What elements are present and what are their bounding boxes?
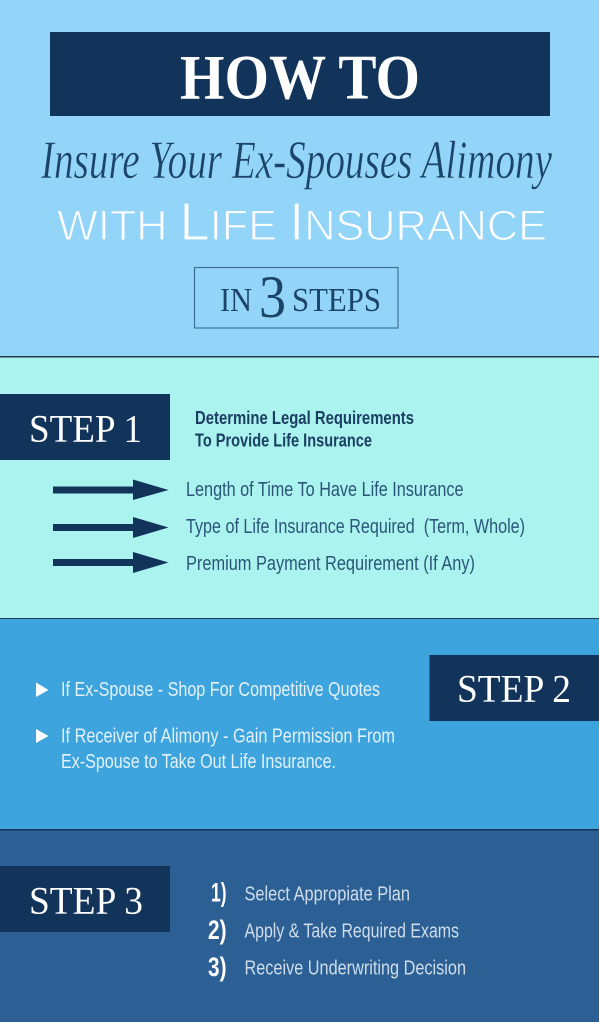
list item 1: Select Appropiate Plan [244, 884, 410, 906]
text: ex-spouse: If Ex-Spouse - Shop For Competitive Quotes [61, 679, 380, 701]
step 2 label: STEP 2 [457, 668, 571, 710]
text: receiver of alimony [61, 726, 395, 773]
list item 1: 1) [211, 878, 226, 908]
list item 3 [208, 952, 466, 982]
text: receiver of alimony: Ex-Spouse to Take Out Life Insurance. [61, 751, 336, 773]
title banner: how to [50, 32, 550, 116]
step 3 label [0, 866, 170, 932]
item: type of insurance: Type of Life Insurance Required (Term, Whole) [186, 516, 525, 538]
badge: in 3 steps [194, 264, 398, 330]
step 1 heading: To Provide Life Insurance [195, 430, 372, 450]
bullet 1 [36, 682, 48, 697]
list item 2: 2) [208, 915, 226, 945]
step 2 label [430, 655, 599, 721]
panel: step 2 [0, 619, 599, 829]
list item 3: 3) [208, 952, 226, 982]
arrow 1 [53, 480, 168, 500]
step 1 heading: Determine Legal Requirements [195, 408, 414, 428]
title banner: how to: HOW TO [180, 42, 420, 112]
badge: in 3 steps: IN [220, 282, 252, 319]
text: receiver of alimony: If Receiver of Alimony - Gain Permission From [61, 726, 395, 748]
heading: with life insurance: WITH LIFE INSURANCE [57, 192, 547, 252]
arrow 2 [53, 517, 168, 538]
panel: step 1 [0, 358, 599, 618]
badge: in 3 steps: 3 [259, 264, 286, 330]
list item 2: Apply & Take Required Exams [244, 920, 459, 942]
step 1 label [0, 394, 170, 460]
step 1 heading [195, 408, 414, 450]
item: premium payment: Premium Payment Requirement (If Any) [186, 553, 475, 575]
step 1 label: STEP 1 [29, 408, 142, 450]
badge: in 3 steps: STEPS [292, 282, 381, 319]
step 3 label: STEP 3 [29, 880, 143, 922]
panel: header [0, 0, 599, 356]
item: length of time: Length of Time To Have Life Insurance [186, 479, 464, 501]
list item 3: Receive Underwriting Decision [244, 958, 466, 980]
bullet 2 [36, 729, 48, 743]
panel: step 3 [0, 830, 599, 1022]
list item 2 [208, 915, 459, 945]
arrow 3 [53, 552, 168, 573]
list item 1 [211, 878, 410, 908]
